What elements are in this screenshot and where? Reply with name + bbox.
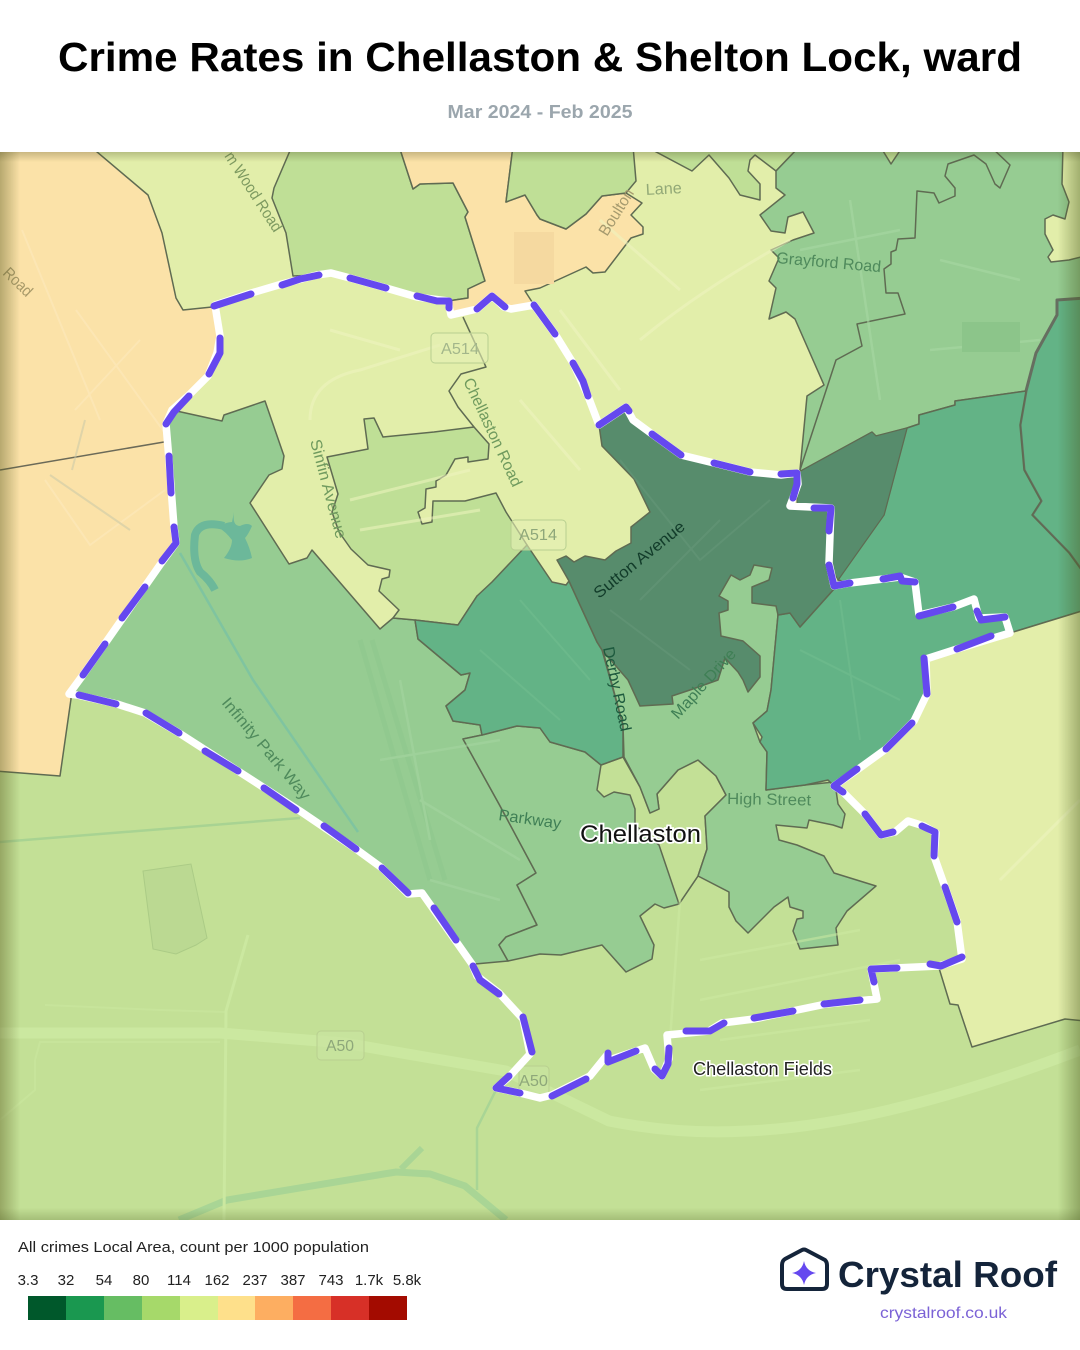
title: Crime Rates in Chellaston & Shelton Lock, ward [58, 34, 1022, 80]
map labels: A50 [519, 1073, 548, 1090]
area: north light green [272, 146, 485, 301]
legend values: 32 [58, 1272, 74, 1289]
logo: Crystal Roof [782, 1250, 1058, 1322]
area: Maple Drive green [600, 556, 876, 949]
area: east dark wedge [797, 428, 907, 580]
area: Parkway green [463, 726, 726, 972]
map labels: m Wood Road [221, 149, 285, 235]
area: Sutton Avenue dark green [557, 407, 834, 706]
map labels: Boulton [596, 186, 638, 239]
map labels: Parkway [497, 807, 562, 833]
area: west and Infinity Park green [69, 401, 537, 964]
map water and roads [0, 200, 1080, 1220]
legend values: 80 [133, 1272, 149, 1289]
lake [194, 512, 252, 590]
legend title: All crimes Local Area, count per 1000 population [18, 1239, 369, 1256]
map labels: High Street [727, 791, 812, 809]
area: north-east green [760, 146, 1080, 473]
subtitle: date range: Mar 2024 - Feb 2025 [448, 102, 632, 122]
area: south-east pale yellow [834, 610, 1080, 1047]
map edge vignette [0, 152, 1080, 1220]
legend values: 5.8k [393, 1272, 422, 1289]
area: east-central green [753, 577, 1010, 790]
patch: built-up orange block [514, 232, 554, 284]
map labels: Sutton Avenue [591, 518, 689, 602]
map labels: Maple Drive [668, 646, 740, 723]
legend values: 237 [242, 1272, 268, 1289]
legend values: 1.7k [355, 1272, 384, 1289]
area: inner yellow-green [327, 418, 527, 625]
legend values: 743 [318, 1272, 344, 1289]
icon: house with star [782, 1250, 827, 1289]
map labels: Chellaston Road [459, 376, 525, 490]
map labels [0, 149, 882, 1090]
map labels: Derby Road [599, 645, 634, 733]
legend colour scale [28, 1296, 407, 1320]
map labels: Chellaston Fields [693, 1059, 832, 1079]
area: west orange [0, 140, 220, 776]
legend values: 387 [280, 1272, 306, 1289]
map labels: Lane [645, 180, 682, 199]
map labels: A514 [519, 527, 557, 544]
legend values [18, 1272, 422, 1289]
playing field patches [962, 322, 1020, 352]
map labels: Grayford Road [776, 250, 882, 276]
legend values: 3.3 [18, 1272, 38, 1289]
map labels: Infinity Park Way [218, 695, 313, 804]
map labels: Chellaston [580, 821, 701, 848]
area: east green [838, 391, 1080, 633]
map labels: Sinfin Avenue [306, 438, 349, 541]
map labels: Road [0, 265, 35, 300]
website: crystalroof.co.uk [880, 1305, 1008, 1322]
legend values: 162 [204, 1272, 230, 1289]
airfield outline [143, 864, 207, 954]
area: central-west green [415, 545, 623, 765]
legend values: 114 [167, 1272, 191, 1289]
area: north light green 3 [654, 152, 793, 201]
area: north orange [399, 146, 643, 315]
legend values: 54 [96, 1272, 112, 1289]
logo wordmark: Crystal Roof [838, 1254, 1058, 1295]
map labels: A50 [326, 1038, 354, 1055]
choropleth map [0, 140, 1080, 1220]
ward boundary [69, 273, 1010, 1098]
legend [18, 1239, 422, 1320]
area: north light green 2 [506, 146, 636, 229]
road badges [317, 333, 566, 1095]
map labels: A514 [441, 341, 479, 358]
area: far east green [1020, 298, 1080, 575]
